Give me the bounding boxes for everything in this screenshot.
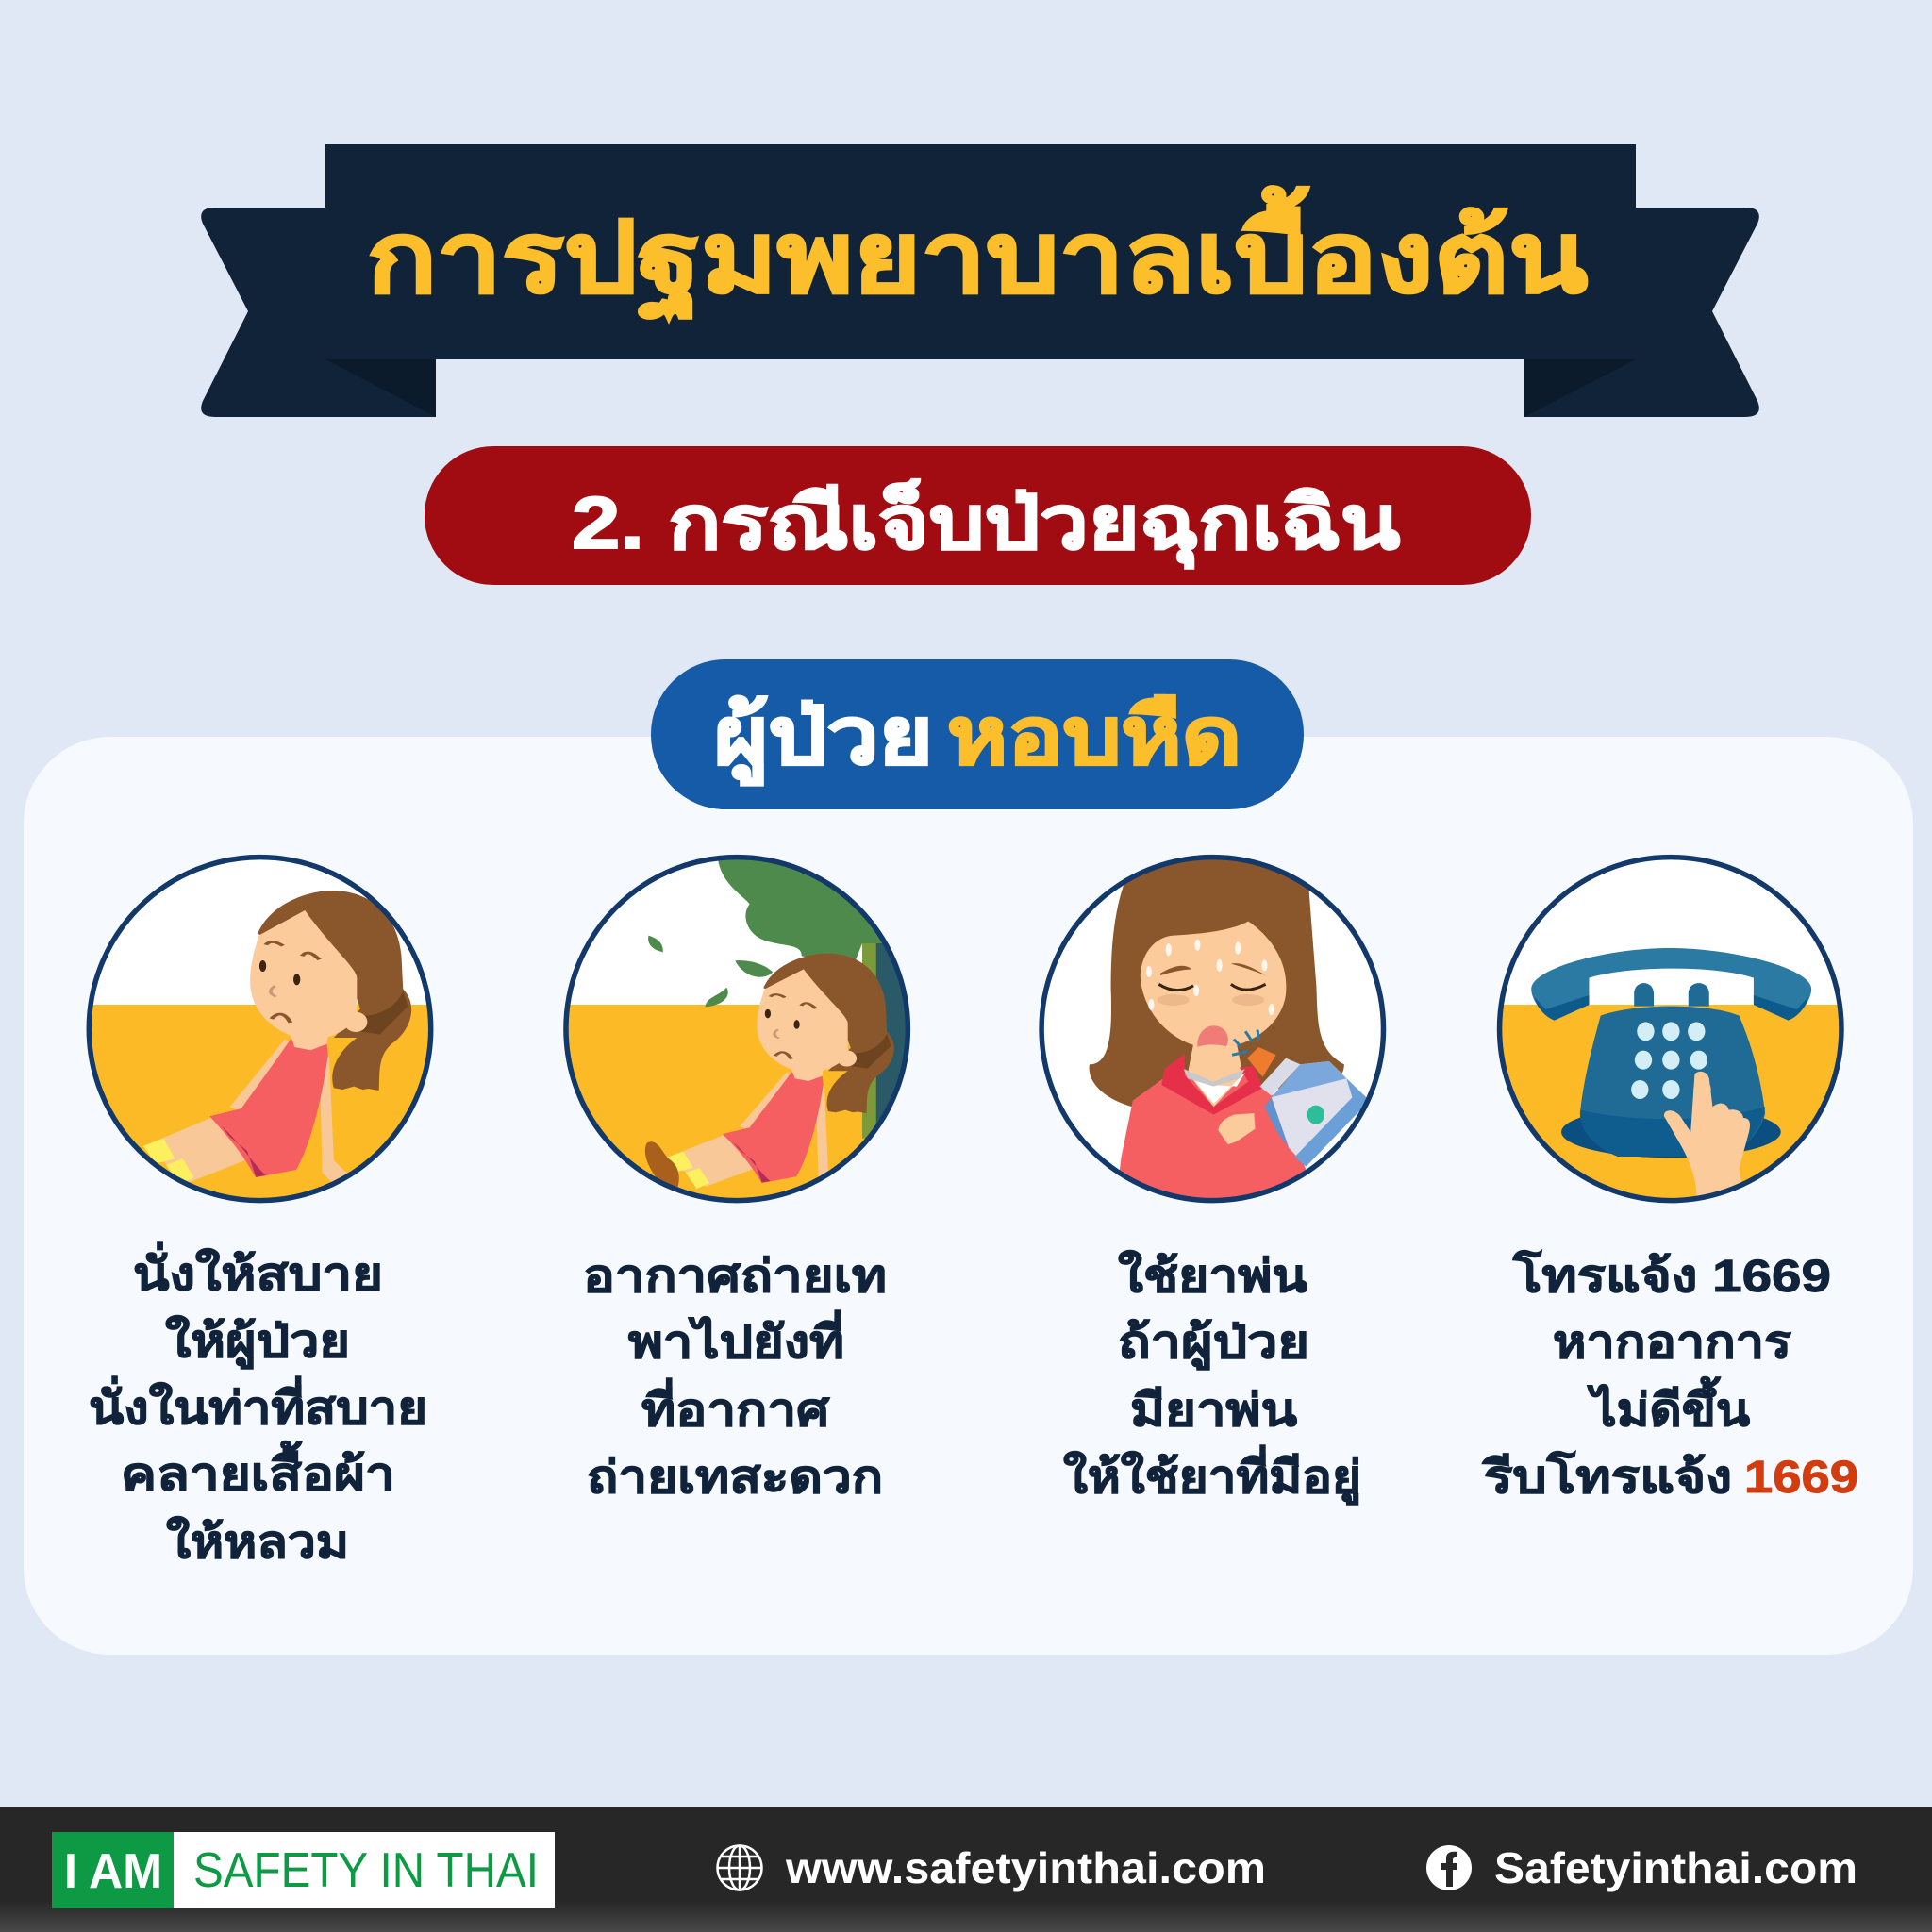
panel: main content [24, 737, 1913, 1655]
text: column 4: 1669 [1744, 1453, 1858, 1503]
text: column 2: พาไปยังที่ [628, 1309, 844, 1368]
text: column 3: ใช้ยาพ่น [1118, 1249, 1307, 1302]
title ribbon [201, 144, 1759, 417]
text: column 1: ให้ผู้ป่วย [165, 1314, 350, 1370]
icon: girl under a tree [559, 856, 917, 1206]
text: column 2 [583, 1252, 887, 1503]
text: column 3: ถ้าผู้ป่วย [1118, 1318, 1309, 1371]
heading yellow part: หอบหืด [947, 691, 1241, 780]
text: column 2: ถ่ายเทสะดวก [587, 1453, 883, 1503]
icon: girl sitting comfortably [86, 856, 438, 1206]
blue pill: heading [651, 659, 1304, 809]
text: column 4: ไม่ดีขึ้น [1586, 1376, 1750, 1436]
icon: facebook [1426, 1845, 1472, 1890]
text: column 1: นั่งให้สบาย [133, 1241, 383, 1300]
logo: I AM [64, 1844, 162, 1899]
icon: woman using inhaler [1035, 856, 1392, 1205]
text: column 1: ให้หลวม [166, 1515, 349, 1568]
text: column 3: ให้ใช้ยาที่มีอยู่ [1063, 1444, 1361, 1506]
text: column 3 [1063, 1249, 1361, 1506]
logo [52, 1832, 555, 1908]
heading white part: ผู้ป่วย [714, 691, 933, 786]
logo: SAFETY IN THAI [193, 1843, 539, 1898]
text: column 3: มียาพ่น [1130, 1386, 1297, 1436]
text: column 1: คลายเสื้อผ้า [121, 1441, 395, 1500]
text: column 4: หากอาการ [1553, 1318, 1791, 1368]
text: column 2: อากาศถ่ายเท [583, 1252, 887, 1302]
text: column 4 [1481, 1249, 1858, 1503]
text: column 1 [89, 1241, 427, 1568]
icon: telephone with finger dialing [1496, 856, 1849, 1206]
text: column 4: โทรแจ้ง 1669 [1512, 1249, 1831, 1302]
website: www.safetyinthai.com [785, 1843, 1266, 1892]
title text: การปฐมพยาบาลเบื้องต้น [367, 186, 1588, 323]
text: column 1: นั่งในท่าที่สบาย [89, 1375, 427, 1434]
text: column 2: ที่อากาศ [641, 1377, 831, 1436]
icon: globe [717, 1845, 762, 1890]
red pill: subtitle [425, 446, 1531, 585]
text: column 4: รีบโทรแจ้ง [1481, 1450, 1732, 1503]
facebook name: Safetyinthai.com [1494, 1843, 1857, 1892]
footer bar [0, 1807, 1932, 1932]
subtitle text: 2. กรณีเจ็บป่วยฉุกเฉิน [572, 479, 1400, 569]
